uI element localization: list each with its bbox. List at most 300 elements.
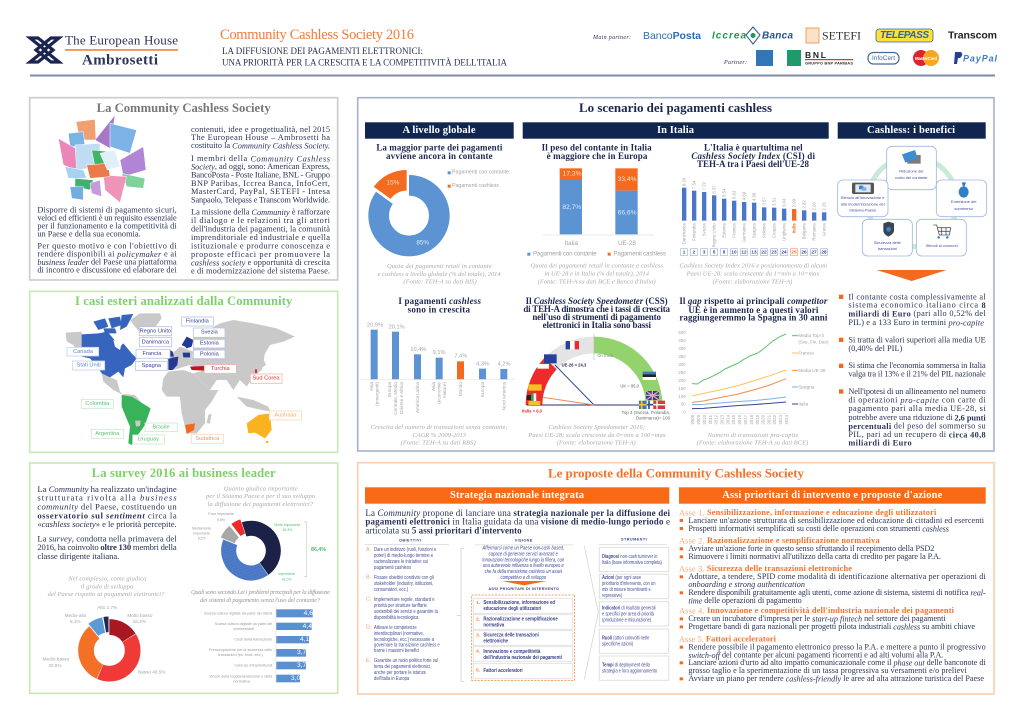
chart: grado di sviluppo: 32,5% xyxy=(48,663,62,668)
chart: Cashless Society Index: Ungheria xyxy=(781,223,786,241)
column: obiettivi: B. xyxy=(366,575,371,581)
chart: pagamenti cashless in crescita: Asia xyxy=(431,382,436,391)
column: strumenti: repressive) xyxy=(602,593,622,599)
text: right column: il dialogo e le relazioni tra gli attori xyxy=(191,216,331,225)
country labels: Spagna xyxy=(142,363,162,369)
text: benefici key points: pagamento pari alla media UE-28, si xyxy=(848,404,986,413)
chart: problemi principali: Vincoli della regolamentazione e della xyxy=(209,674,273,678)
text: left column: veloci ed efficienti è un requisito essenziale xyxy=(37,213,177,222)
chart: numero di transazioni pro-capite: (Fonte: elaborazione TEH-A su dati BCE) xyxy=(697,439,808,446)
chart: peso del contante: Quota dei pagamenti retail in contante e cashless xyxy=(531,262,663,269)
world map xyxy=(66,313,295,445)
chart: problemi principali: Scarsa cultura digitale da parte dei clienti xyxy=(204,611,272,615)
column: visione: innovazioni tecnologiche lungo la filiera, con xyxy=(482,557,564,564)
chart: numero di transazioni pro-capite: 2019 xyxy=(755,414,760,425)
column: visione: educazione degli utilizzatori xyxy=(483,605,542,612)
chart: numero di transazioni pro-capite: 200 xyxy=(678,378,686,383)
chart: peso del contante: (Fonte: TEH-A su dati BCE e Banca d'Italia) xyxy=(538,278,656,285)
section bar: In Italia xyxy=(523,122,829,139)
country labels: Finlandia xyxy=(186,319,210,325)
icon: shield xyxy=(883,222,894,237)
main partner logos xyxy=(592,27,997,44)
partner logos: MasterCard xyxy=(915,56,937,61)
country labels: Argentina xyxy=(95,431,120,437)
chart: numero di transazioni pro-capite: Italia xyxy=(798,401,809,406)
column: strumenti: e specifici per area di priorità xyxy=(602,611,654,618)
chart: peso del contante: 17,3% xyxy=(563,170,582,177)
chart: pagamenti cashless in crescita: 4,3% xyxy=(476,361,489,367)
chart: numero di transazioni pro-capite: 2021 xyxy=(766,414,771,425)
chart: Cashless Society Speedometer: nell'uso di strumenti di pagamento xyxy=(532,312,661,322)
chart: peso del contante: Pagamenti con contante xyxy=(533,250,597,257)
chart: importanza dei pagamenti elettronici: 5,5% xyxy=(217,518,225,522)
column: obiettivi: disponibilità tecnologica xyxy=(374,614,418,621)
chart: pagamenti cashless in crescita: I pagamenti cashless xyxy=(398,296,481,306)
chart: pagamenti a livello globale: 15% xyxy=(387,179,400,186)
column: visione: una autorevole influenza a livello europeo e xyxy=(483,563,564,569)
chart: numero di transazioni pro-capite: 2020 xyxy=(760,414,765,425)
chart: numero di transazioni pro-capite: 300 xyxy=(678,362,686,367)
chart: importanza dei pagamenti elettronici: importante xyxy=(193,531,210,535)
chart: importanza dei pagamenti elettronici: Mediamente xyxy=(192,526,211,530)
column: visione: elettroniche xyxy=(483,638,508,645)
chart: pagamenti cashless in crescita: Oriente e Africa xyxy=(399,382,404,414)
partner logos xyxy=(723,50,997,66)
chart: Cashless Society Index: 6.37 xyxy=(711,185,716,194)
chart: peso del contante: 66,6% xyxy=(618,209,637,216)
panel: I casi esteri analizzati dalla Community xyxy=(30,291,338,452)
chart: problemi principali: Preoccupazione per la sicurezza delle xyxy=(209,648,272,652)
asse 4 xyxy=(679,606,975,631)
country labels: Polonia xyxy=(200,351,220,357)
chart: Cashless Society Index: Paesi UE-28; scala crescente da 1=min a 10=max xyxy=(686,270,819,277)
asse 3: Rendere disponibili gratuitamente agli utenti, come azione di sistema, sistemi di notifica real- xyxy=(688,588,986,597)
country labels: Colombia xyxy=(85,401,110,407)
column: visione: Razionalizzazione e semplificazione xyxy=(483,616,558,623)
chart: Cashless Society Speedometer xyxy=(522,296,671,446)
chart: Cashless Society Index: 8.26 xyxy=(681,177,686,186)
flags xyxy=(527,341,665,409)
column: visione: ASSI PRIORITARI DI INTERVENTO xyxy=(488,587,559,591)
chart: Cashless Society Index: 3.57 xyxy=(761,197,766,206)
chart: numero di transazioni pro-capite: Il gap rispetto ai principali competitor xyxy=(679,296,828,306)
asse 4: Creare un incubatore d'impresa per le start-up fintech nel settore dei pagamenti xyxy=(688,614,946,623)
column: obiettivi: pagamenti cashless xyxy=(374,565,411,571)
chart: numero di transazioni pro-capite: 150 xyxy=(678,386,686,391)
column: obiettivi: Attivare le competenze xyxy=(374,624,417,631)
chart: pagamenti a livello globale: (Fonte: TEH-A su dati BIS) xyxy=(403,278,477,285)
chart: problemi principali: Quali sono secondo Lei i problemi principali per la diffusione xyxy=(191,589,330,596)
chart: Cashless Society Speedometer: Danimarca)= 100 xyxy=(636,415,671,420)
main partner logos: TELEPASS xyxy=(880,30,929,41)
chart: Cashless Society Index: 10 xyxy=(731,249,737,254)
chart: Cashless Society Index: Croazia xyxy=(771,223,776,238)
column: strumenti: Ruoli (attori coinvolti nelle xyxy=(602,635,649,642)
chart: pagamenti cashless in crescita: (economie xyxy=(436,382,441,404)
chart: pagamenti cashless in crescita: Asia xyxy=(369,382,374,391)
chart: grado di sviluppo: Medio-alto xyxy=(65,613,87,618)
image: flying euro banknotes xyxy=(58,115,146,203)
chart: peso del contante xyxy=(527,143,666,285)
asse 2: Asse 2. Razionalizzazione e semplificazione normativa xyxy=(679,536,880,545)
asse 5: Asse 5. Fattori acceleratori xyxy=(679,634,777,643)
column: visione: Affermarsi come un Paese non-cash based, xyxy=(482,545,564,552)
chart: pagamenti cashless in crescita: CAGR % 2009-2013 xyxy=(412,432,467,439)
intro text: community del Paese, costituendo un xyxy=(37,502,177,512)
chart: Cashless Society Speedometer: Top 3 (Svezia, Finlandia, xyxy=(622,410,670,415)
chart: importanza dei pagamenti elettronici: Quanto giudica importante xyxy=(224,485,298,492)
chart: grado di sviluppo: 8,1% xyxy=(70,619,81,624)
intro text xyxy=(37,484,177,561)
chart: problemi principali: 3,7 xyxy=(297,649,307,656)
column: obiettivi: sostenibili dei servizi e garantire la xyxy=(374,608,438,615)
chart: Cashless Society Index: 2.82 xyxy=(801,200,806,209)
main partner logos: BancoPosta xyxy=(643,30,701,42)
chart: Cashless Society Index: 2.26 xyxy=(821,202,826,211)
chart: Cashless Society Index: Francia xyxy=(731,223,736,238)
chart: importanza dei pagamenti elettronici: Poco importante xyxy=(208,512,234,516)
column: obiettivi: stakeholder (industry, istituzioni, xyxy=(374,580,433,587)
text: right column: istituzionale e produrre conoscenza e xyxy=(191,241,330,250)
column: obiettivi: A. xyxy=(366,547,371,553)
chart: pagamenti cashless in crescita: 10,4% xyxy=(410,347,426,353)
diagram: Cashless i benefici: Sicurezza delle xyxy=(874,240,902,245)
asse 5 xyxy=(679,634,986,683)
text: benefici key points: valga tra il 13% e il 21% del PIL nazionale xyxy=(848,369,986,378)
asse 2: Rimuovere i limiti normativi all'utilizzo della carta di credito per pagare la P.A. xyxy=(688,552,941,561)
chart: Cashless Society Speedometer: Il Cashless Society Speedometer (CSS) xyxy=(526,296,668,306)
chart: numero di transazioni pro-capite: 0 xyxy=(683,409,686,414)
chart: Cashless Society Index: 23 xyxy=(771,249,777,254)
intro text: osservatorio sul sentiment circa la xyxy=(37,510,177,520)
chart: importanza dei pagamenti elettronici xyxy=(192,485,326,581)
chart: problemi principali: 3,0 xyxy=(291,675,301,682)
chart: pagamenti cashless in crescita: 4,2% xyxy=(498,361,511,367)
column: visione: 4. xyxy=(476,649,481,655)
country labels: Sud Corea xyxy=(252,376,280,382)
chart: Cashless Society Index: Italia xyxy=(791,223,796,233)
column: visione: Innovazione e competitività xyxy=(483,648,540,655)
column: obiettivi: priorità per strutture tariffarie xyxy=(374,602,427,609)
column: obiettivi: Dare un indirizzo (ruoli, funzioni e xyxy=(374,547,436,553)
column: strumenti: (produzione e misurazione) xyxy=(602,617,652,624)
chart: Cashless Society Index: 28 xyxy=(821,249,827,254)
country labels: Australia xyxy=(274,413,297,419)
column: strumenti: Italia (base informativa completa) xyxy=(602,560,662,566)
section bar: A livello globale xyxy=(365,122,514,139)
panel: Lo scenario dei pagamenti cashless xyxy=(358,98,994,451)
chart: pagamenti cashless in crescita: Nord America xyxy=(501,382,506,410)
diagram: Cashless i benefici: Riduzione del xyxy=(899,168,924,173)
title: Community Cashless Society 2016 xyxy=(220,27,414,43)
chart: numero di transazioni pro-capite: (Sve, Fin, Dan) xyxy=(798,339,829,344)
column: visione: che fa della transizione cashless un asset xyxy=(485,569,563,575)
chart: Cashless Society Index: 1 xyxy=(683,249,686,254)
column: obiettivi: governare la transizione cashless e xyxy=(374,642,440,649)
asse 2 xyxy=(679,536,941,561)
text: right column: I membri della Community Cashless xyxy=(191,154,330,163)
asse 3: onboarding e strong authentication xyxy=(688,580,805,589)
chart: pagamenti cashless in crescita: (Fonte: TEH-A su dati RBS) xyxy=(401,439,476,446)
chart: Cashless Society Index: Cashless Society Index 2016 e posizionamento di alcuni xyxy=(679,262,828,269)
chart: pagamenti a livello globale xyxy=(376,143,509,285)
text: left column: Per questo motivo e con l'obiettivo di xyxy=(37,241,177,250)
column: obiettivi: consumatori, ecc.) xyxy=(374,586,409,593)
logo: The European House Ambrosetti: Ambrosetti xyxy=(82,52,158,68)
chart: problemi principali: Costi della transazione xyxy=(234,638,272,642)
logo: The European House Ambrosetti xyxy=(30,32,178,68)
chart: Cashless Society Index xyxy=(678,143,828,285)
column: visione xyxy=(472,538,575,680)
chart: Cashless Society Index: Spagna xyxy=(751,223,756,238)
chart: Cashless Society Speedometer: UK = 95,0 xyxy=(620,383,640,388)
asse 5: switch-off del contante per alcuni pagamenti ricorrenti e ad alti volumi alla P.A. xyxy=(688,650,943,659)
column: obiettivi: Garantire un ruolo politico forte sul xyxy=(374,658,438,664)
chart: numero di transazioni pro-capite: 450 xyxy=(678,338,686,343)
icon: money bag xyxy=(959,182,969,198)
chart: pagamenti cashless in crescita: 20,9% xyxy=(367,323,383,329)
chart: Cashless Society Index: Finlandia xyxy=(691,223,696,241)
country labels: Uruguay xyxy=(138,437,159,443)
column: visione: capace di generare servizi avanzati e xyxy=(489,551,558,558)
chart: Cashless Society Index: 7.54 xyxy=(691,180,696,189)
chart: pagamenti cashless in crescita: Crescita del numero di transazioni senza contante; xyxy=(371,424,508,431)
chart: importanza dei pagamenti elettronici: Molto importante xyxy=(274,523,300,527)
text: right column: La missione della Community è rafforzare xyxy=(191,207,330,216)
chart: Cashless Society Index: TEH-A tra i Paesi dell'UE-28 xyxy=(697,159,809,169)
chart: Cashless Society Index: Polonia xyxy=(761,223,766,238)
partner logos: PayPal xyxy=(963,54,997,64)
chart: Cashless Society Index: 2 xyxy=(693,249,696,254)
logo: The European House Ambrosetti: The European House xyxy=(65,32,178,48)
chart: Cashless Society Index: (Fonte: elaborazione TEH-A) xyxy=(713,278,792,285)
chart: pagamenti cashless in crescita: America Latina xyxy=(415,382,420,413)
text: benefici key points: Il contante costa complessivamente al xyxy=(848,292,986,301)
section bar: Cashless i benefici xyxy=(838,122,986,139)
diagram: Cashless i benefici: alla modernizzazione del xyxy=(841,201,885,206)
diagram: Cashless i benefici: Stimoli ai consumi xyxy=(926,243,958,248)
chart: Cashless Society Index: 3 xyxy=(703,249,706,254)
country labels: Brasile xyxy=(152,424,170,430)
intro text: «cashless society» e le priorità percepite. xyxy=(37,519,177,529)
text: right column: Sanpaolo, Telepass e Transcom Worldwide. xyxy=(191,195,330,204)
asse 3: Asse 3. Sicurezza delle transazioni elettroniche xyxy=(679,564,852,573)
text: right column: e di modernizzazione del sistema Paese. xyxy=(191,266,330,275)
column: obiettivi: OBIETTIVI xyxy=(399,539,421,543)
chart: pagamenti cashless in crescita: Europa xyxy=(480,382,485,397)
main partner logos: Banca xyxy=(762,30,793,42)
chart: numero di transazioni pro-capite: 2023 xyxy=(778,414,783,425)
chart: numero di transazioni pro-capite: 2015 xyxy=(731,414,736,425)
partner logos: BNL xyxy=(805,50,826,60)
asse 5: Avviare un piano per rendere cashless-friendly le aree ad alta attrazione turistica del Paese xyxy=(688,674,984,683)
column: obiettivi: anche per portare le istanze xyxy=(374,670,426,676)
chart: Cashless Society Index: 4.69 xyxy=(741,191,746,200)
chart: numero di transazioni pro-capite: 2009 xyxy=(696,414,701,425)
country labels: Sudafrica xyxy=(195,436,220,442)
subtitle: UNA PRIORITÀ PER LA CRESCITA E LA COMPETITIVITÀ DELL'ITALIA xyxy=(222,58,508,68)
chart: pagamenti a livello globale: Pagamenti cashless xyxy=(452,183,499,189)
country labels: Turchia xyxy=(211,366,231,372)
chart: pagamenti cashless in crescita: Mondo xyxy=(458,382,463,396)
chart: pagamenti cashless in crescita: 9,1% xyxy=(433,350,446,356)
column: obiettivi: interdisciplinari (normative, xyxy=(374,630,424,637)
chart: problemi principali: 3,7 xyxy=(297,662,307,669)
partner logos: GRUPPO BNP PARIBAS xyxy=(805,60,853,66)
chart: grado di sviluppo: 16,2% xyxy=(133,619,146,624)
chart: Cashless Society Speedometer: On track xyxy=(597,353,614,358)
text: benefici key points: miliardi di Euro xyxy=(848,438,912,447)
column: strumenti: specifiche azioni) xyxy=(602,641,633,648)
chart: grado di sviluppo: Nel complesso, come giudica xyxy=(67,575,146,582)
column: obiettivi: tema dei pagamenti elettronici, xyxy=(374,664,431,670)
chart: peso del contante: Italia xyxy=(565,240,579,247)
country labels: Danimarca xyxy=(142,339,170,345)
chart: Cashless Society Index: Regno Unito xyxy=(711,223,716,247)
text: benefici key points: di operazioni pro-capite con carte di xyxy=(848,395,986,404)
chart: Cashless Society Index: 3.04 xyxy=(781,198,786,207)
subtitle xyxy=(222,46,508,68)
text: right column: MasterCard, PayPal, SETEFI - Intesa xyxy=(191,187,330,196)
chart: grado di sviluppo: Alto 2,7% xyxy=(97,605,117,610)
panel: Le proposte della Community Cashless Society xyxy=(358,463,994,694)
text: benefici key points: PIL, pari ad un recupero di circa 40,8 xyxy=(848,430,986,439)
text: right column: BancoPosta - Poste Italiane, BNL - Gruppo xyxy=(191,170,330,179)
chart: numero di transazioni pro-capite: Media UE-28 xyxy=(798,368,826,373)
panel: La survey 2016 ai business leader xyxy=(30,463,338,693)
heading: La survey 2016 ai business leader xyxy=(92,466,276,480)
asse 3: time delle operazioni di pagamento xyxy=(688,596,802,605)
asse 1 xyxy=(679,508,985,533)
main partner logos: Main partner: xyxy=(592,35,631,41)
section bar: Strategia nazionale integrata xyxy=(365,487,669,504)
text: left column: per il funzionamento e la competitività di xyxy=(37,221,177,230)
section bar: Assi prioritari: Assi prioritari di intervento e proposte d'azione xyxy=(722,490,943,501)
text: right column: contenuti, idee e progettualità, nel 2015 xyxy=(191,125,330,134)
chart: pagamenti cashless in crescita: Centrale, Medio xyxy=(393,382,398,415)
column: visione: Fattori acceleratori xyxy=(483,667,523,674)
chart: problemi principali: 4,4 xyxy=(303,623,312,630)
text: right column: dell'industria dei pagamenti, la comunità xyxy=(191,224,330,233)
header xyxy=(30,27,997,76)
chart: numero di transazioni pro-capite xyxy=(678,296,829,446)
chart: Cashless Society Index: Romania xyxy=(811,223,816,241)
column: visione: VISIONE xyxy=(515,538,533,542)
chart: Cashless Society Index: 27 xyxy=(811,249,817,254)
diagram: Cashless i benefici: Sistema-Paese xyxy=(849,207,877,212)
text: benefici key points: Si tratta di valori superiori alla media UE xyxy=(848,335,986,344)
chart: importanza dei pagamenti elettronici: Importante xyxy=(278,572,295,576)
column: obiettivi: tecnologiche, ecc.) necessarie a xyxy=(374,636,434,643)
text: left column: business leader del Paese una piattaforma xyxy=(37,257,177,266)
column: visione: Sensibilizzazione, informazione ed xyxy=(483,600,555,606)
chart: problemi principali: 4,6 xyxy=(304,610,313,617)
chart: Cashless Society Index: Germania xyxy=(741,223,746,242)
text: benefici key points: potrebbe avere una riduzione di 2,6 punti xyxy=(848,413,986,422)
chart: numero di transazioni pro-capite: 50 xyxy=(681,401,686,406)
chart: Cashless Society Index: Cashless Society Index (CSI) di xyxy=(691,151,815,161)
text: right column: proposte efficaci per promuovere la xyxy=(191,250,330,259)
column: strumenti xyxy=(599,538,669,680)
column: obiettivi: E. xyxy=(366,658,371,664)
chart: problemi principali xyxy=(191,589,330,683)
chart: Cashless Society Index: Estonia xyxy=(721,223,726,238)
chart: Cashless Society Speedometer: elettronici in Italia sono bassi xyxy=(543,320,651,330)
asse 5: Lanciare azioni d'urto ad alto impatto comunicazionale come il phase out delle banconote di xyxy=(688,658,986,667)
text: benefici key points: (0,40% del PIL) xyxy=(848,344,903,353)
intro text: 2016, ha coinvolto oltre 130 membri della xyxy=(37,542,177,552)
chart: importanza dei pagamenti elettronici: 8,1% xyxy=(198,537,206,541)
column: visione: normativa xyxy=(483,622,504,629)
icon: banknotes xyxy=(902,150,921,164)
chart: importanza dei pagamenti elettronici: 41,0% xyxy=(282,577,292,581)
chart: numero di transazioni pro-capite: Francia xyxy=(798,350,814,355)
column: obiettivi xyxy=(365,539,449,682)
column: obiettivi: Fissare obiettivi condivisi con gli xyxy=(374,574,434,581)
section bar: Assi prioritari xyxy=(679,487,986,504)
chart: Cashless Society Index: 2.99 xyxy=(791,198,796,207)
intro text: La Community propone di lanciare una strategia nazionale per la diffusione dei xyxy=(365,508,670,518)
chart: pagamenti cashless in crescita: (emergenti) xyxy=(374,382,379,406)
chart: pagamenti a livello globale: La maggior parte dei pagamenti xyxy=(376,143,503,153)
chart: Cashless Society Index: 26 xyxy=(801,249,807,254)
column: strumenti: strategia e loro aggiornamento xyxy=(602,668,657,675)
column: visione: Sicurezza delle transazioni xyxy=(483,632,539,639)
asse 3 xyxy=(679,564,986,605)
chart: Cashless Society Index: 7.22 xyxy=(701,181,706,190)
chart: numero di transazioni pro-capite: UE è in aumento e a questi valori xyxy=(688,305,819,315)
chart: problemi principali: normativa xyxy=(233,679,251,683)
chart: numero di transazioni pro-capite: 500 xyxy=(678,330,686,335)
text: benefici key points: Nell'ipotesi di un allineamento nel numero xyxy=(848,387,986,396)
chart: Cashless Society Speedometer: di TEH-A dimostra che i tassi di crescita xyxy=(523,304,670,314)
chart: pagamenti cashless in crescita: 20,1% xyxy=(389,324,405,330)
asse 4: Progettare bandi di gara nazionali per progetti pilota industriali cashless su ambiti chiave xyxy=(688,622,975,631)
country labels: Stati Uniti xyxy=(77,363,101,369)
column: strumenti: prioritario d'intervento, con un xyxy=(602,581,656,587)
text: right column: cashless society e opportunità di crescita xyxy=(191,258,330,267)
chart: peso del contante: è maggiore che in Europa xyxy=(547,151,648,161)
chart: Cashless Society Index: 12 xyxy=(741,249,747,254)
block: strategia nazionale xyxy=(365,508,670,682)
chart: Cashless Society Speedometer: UE-28 = 24,3 xyxy=(562,362,587,367)
chart: Cashless Society Index: 5 xyxy=(713,249,716,254)
text: right column xyxy=(191,125,331,275)
diagram: Cashless i benefici: Stimolo all'innovazione e xyxy=(841,195,885,200)
chart: numero di transazioni pro-capite: raggiungeremmo la Spagna in 30 anni xyxy=(679,313,828,323)
chart: pagamenti cashless in crescita xyxy=(360,296,515,446)
chart: Cashless Society Index: 2.26 xyxy=(811,202,816,211)
chart: numero di transazioni pro-capite: 100 xyxy=(678,394,686,399)
text: benefici key points xyxy=(839,292,986,447)
chart: Cashless Society Index: Grecia xyxy=(821,223,826,236)
column: obiettivi: Implementare regole, standard e xyxy=(374,596,435,603)
text: left column xyxy=(37,205,177,274)
text: right column: Society, ad oggi, sono: American Express, xyxy=(191,162,330,171)
chart: Cashless Society Index: 24 xyxy=(781,249,787,254)
intro text xyxy=(365,508,670,536)
column: strumenti: STRUMENTI xyxy=(621,538,647,542)
column: visione: 1. xyxy=(476,600,481,606)
chart: pagamenti cashless in crescita: Europa xyxy=(387,382,392,397)
chart: problemi principali: Scarsa cultura digitale da parte dei xyxy=(215,622,272,626)
main partner logos: Transcom xyxy=(948,30,997,42)
partner logos: Partner: xyxy=(723,60,747,66)
section bar: In Italia: In Italia xyxy=(657,125,695,136)
text: benefici key points: miliardi di Euro (pari allo 0,52% del xyxy=(848,309,986,318)
asse 1: Lanciare un'azione strutturata di sensibilizzazione ed educazione di cittadini ed esercenti xyxy=(688,516,985,525)
text: benefici key points: sistema economico italiano circa 8 xyxy=(848,300,986,309)
